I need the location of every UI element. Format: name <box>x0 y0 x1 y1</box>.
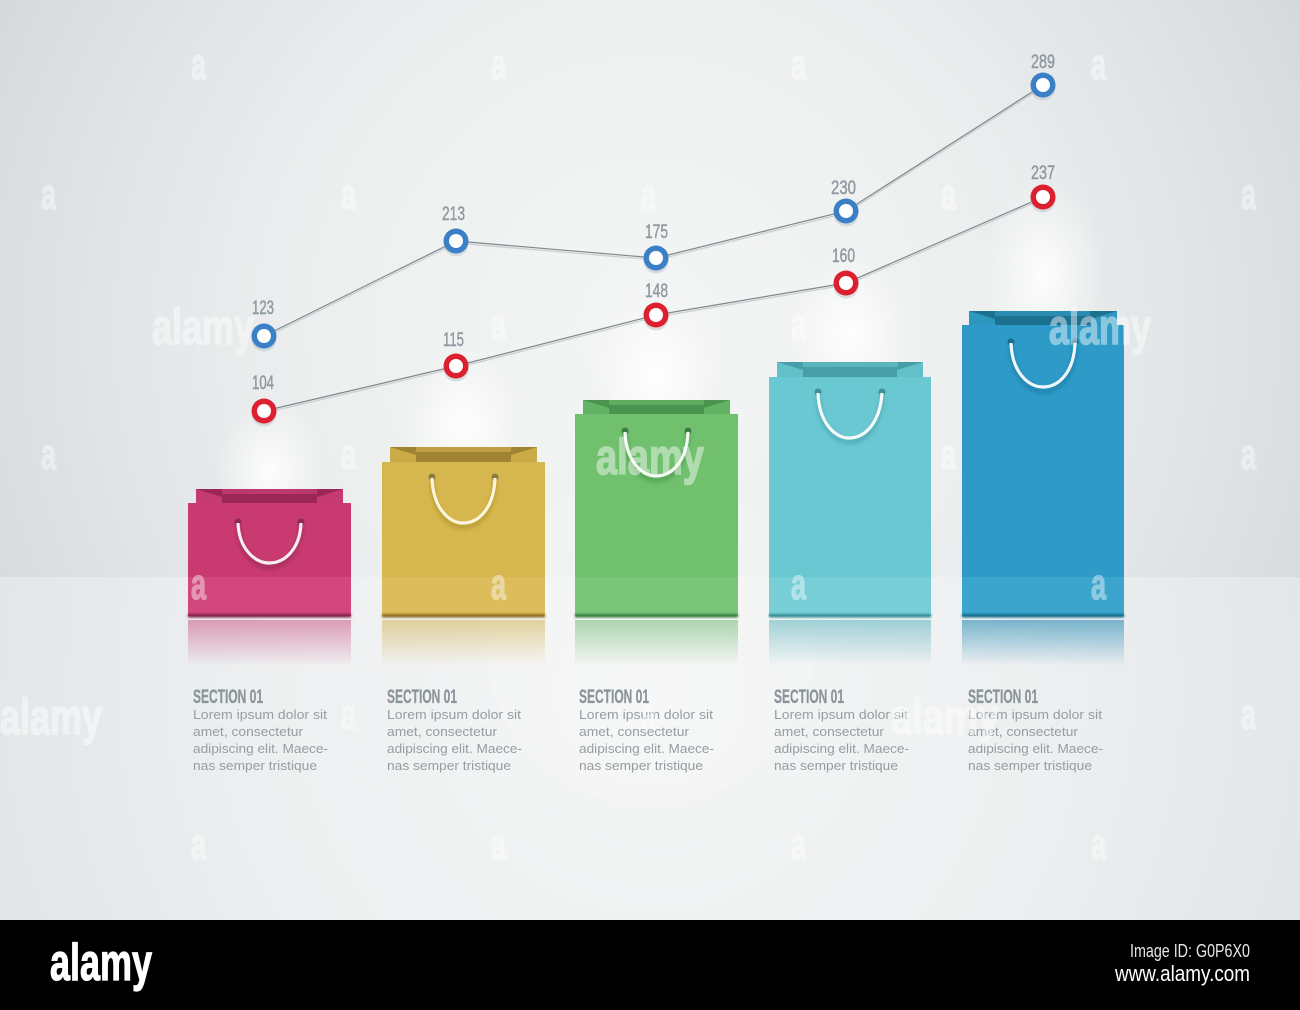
text block: section 4: nas semper tristique <box>774 758 898 773</box>
watermark pattern: a <box>491 560 506 609</box>
text block: section 1: SECTION 01 <box>193 687 263 708</box>
bag 2: yellow <box>382 447 545 666</box>
text block: section 5: adipiscing elit. Maece- <box>968 741 1103 756</box>
watermark pattern: a <box>191 820 206 869</box>
watermark pattern: a <box>1241 170 1256 219</box>
text block: section 4 <box>774 687 909 773</box>
watermark pattern: a <box>941 170 956 219</box>
text block: section 2: SECTION 01 <box>387 687 457 708</box>
background wall <box>0 0 1300 577</box>
line chart: blue series: 230 <box>831 178 856 199</box>
watermark pattern: a <box>341 170 356 219</box>
text block: section 4: Lorem ipsum dolor sit <box>774 707 908 722</box>
text block: section 5: Lorem ipsum dolor sit <box>968 707 1102 722</box>
watermark pattern: alamy <box>152 299 254 355</box>
line chart: red series: 237 <box>1031 163 1055 184</box>
text block: section 2: Lorem ipsum dolor sit <box>387 707 521 722</box>
text block: section 2: adipiscing elit. Maece- <box>387 741 522 756</box>
watermark pattern: a <box>491 40 506 89</box>
text block: section 1: Lorem ipsum dolor sit <box>193 707 327 722</box>
watermark pattern: a <box>191 560 206 609</box>
text block: section 1: adipiscing elit. Maece- <box>193 741 328 756</box>
watermark pattern: a <box>1091 560 1106 609</box>
watermark pattern: alamy <box>1049 299 1151 355</box>
watermark pattern: a <box>341 690 356 739</box>
watermark pattern: a <box>491 300 506 349</box>
text block: section 3: nas semper tristique <box>579 758 703 773</box>
floor <box>0 577 1300 920</box>
text block: section 3 <box>579 687 714 773</box>
text block: section 3: SECTION 01 <box>579 687 649 708</box>
text block: section 4: amet, consectetur <box>774 724 885 739</box>
decorative glow above bags <box>215 175 1103 805</box>
text block: section 5: amet, consectetur <box>968 724 1079 739</box>
text block: section 3: amet, consectetur <box>579 724 690 739</box>
bag 3: green <box>575 400 738 666</box>
line chart: blue series: 289 <box>1031 52 1055 73</box>
line chart: blue series: 175 <box>645 222 668 243</box>
text block: section 2: nas semper tristique <box>387 758 511 773</box>
watermark pattern: a <box>941 430 956 479</box>
footer bar <box>0 920 1300 1010</box>
watermark pattern: a <box>1241 430 1256 479</box>
watermark pattern: a <box>1091 820 1106 869</box>
bag 4: cyan <box>769 362 931 666</box>
watermark pattern: a <box>41 430 56 479</box>
watermark pattern: a <box>191 40 206 89</box>
watermark pattern: a <box>791 560 806 609</box>
watermark pattern: a <box>1241 690 1256 739</box>
watermark pattern: a <box>41 170 56 219</box>
text block: section 1: amet, consectetur <box>193 724 304 739</box>
watermark pattern: a <box>491 820 506 869</box>
text block: section 3: adipiscing elit. Maece- <box>579 741 714 756</box>
watermark pattern: alamy <box>0 689 102 745</box>
text block: section 5: SECTION 01 <box>968 687 1038 708</box>
text block: section 5: nas semper tristique <box>968 758 1092 773</box>
watermark pattern: a <box>791 40 806 89</box>
watermark pattern: alamy <box>596 429 704 485</box>
line chart: red series: 160 <box>832 246 855 267</box>
text block: section 4: SECTION 01 <box>774 687 844 708</box>
watermark pattern: a <box>791 300 806 349</box>
watermark pattern: a <box>1091 40 1106 89</box>
line chart: blue series: 123 <box>252 298 274 319</box>
bag 1: pink <box>188 489 351 666</box>
footer bar: alamy <box>50 934 152 992</box>
text block: section 1 <box>193 687 328 773</box>
line chart: red series: 104 <box>252 373 274 394</box>
watermark pattern: a <box>791 820 806 869</box>
footer bar: www.alamy.com <box>1114 961 1250 986</box>
text block: section 4: adipiscing elit. Maece- <box>774 741 909 756</box>
footer bar: Image ID: G0P6X0 <box>1130 941 1250 961</box>
text block: section 2 <box>387 687 522 773</box>
line chart: blue series <box>252 52 1056 352</box>
watermark pattern: alamy <box>891 689 999 745</box>
line chart: red series: 115 <box>443 330 464 351</box>
text block: section 5 <box>968 687 1103 773</box>
bag 5: blue <box>962 311 1124 666</box>
line chart: red series <box>252 163 1056 426</box>
watermark pattern: a <box>641 690 656 739</box>
text block: section 1: nas semper tristique <box>193 758 317 773</box>
text block: section 2: amet, consectetur <box>387 724 498 739</box>
watermark pattern <box>0 40 1256 869</box>
text block: section 3: Lorem ipsum dolor sit <box>579 707 713 722</box>
watermark pattern: a <box>341 430 356 479</box>
watermark pattern: a <box>641 170 656 219</box>
line chart: red series: 148 <box>645 281 668 302</box>
line chart: blue series: 213 <box>442 204 465 225</box>
